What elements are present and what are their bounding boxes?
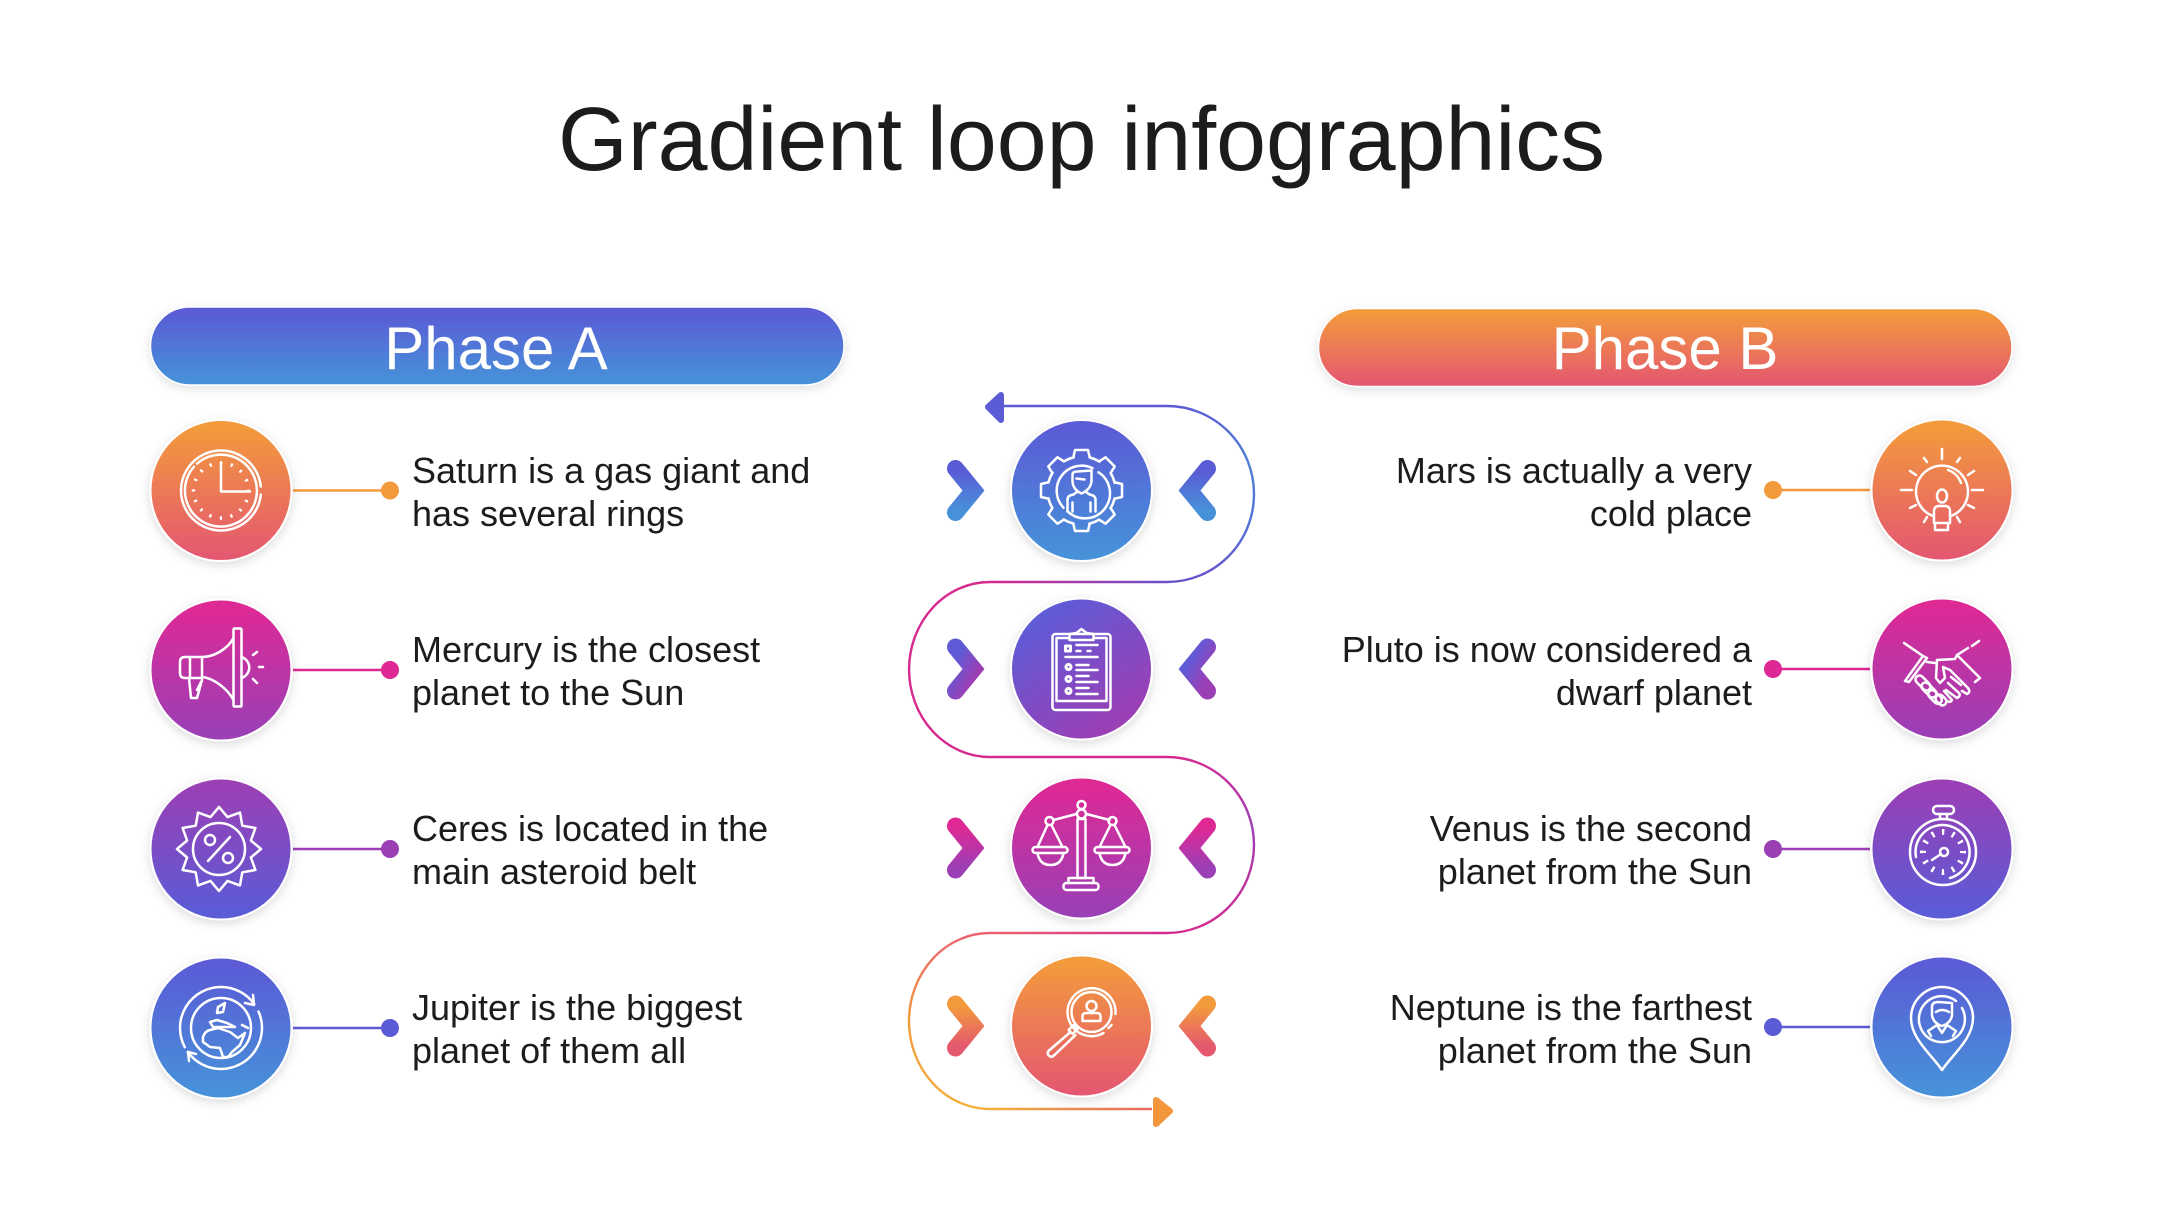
icon: handshake bbox=[1904, 641, 1980, 707]
panel: center step 1 bbox=[956, 420, 1208, 561]
icon: percent badge bbox=[177, 807, 261, 891]
text: Mars: Mars is actually a very bbox=[1396, 450, 1752, 491]
icon: magnifier with person bbox=[1048, 988, 1116, 1057]
panel: Ceres item bbox=[150, 778, 768, 920]
text: Ceres: main asteroid belt bbox=[412, 851, 696, 892]
panel: phase B header bbox=[1318, 308, 2012, 386]
text: Neptune: planet from the Sun bbox=[1438, 1030, 1752, 1071]
text: Mercury: planet to the Sun bbox=[412, 672, 684, 713]
icon: stopwatch bbox=[1910, 806, 1976, 885]
panel: phase A header bbox=[150, 307, 844, 385]
icon: clock bbox=[181, 450, 261, 530]
text: Pluto: dwarf planet bbox=[1556, 672, 1752, 713]
title: Gradient loop infographics bbox=[558, 90, 1605, 190]
text: Jupiter: planet of them all bbox=[412, 1030, 686, 1071]
icon: gear with person bbox=[1041, 450, 1122, 531]
panel: Pluto item bbox=[1342, 598, 2012, 740]
panel: center step 3 bbox=[956, 778, 1208, 918]
text: Mars: cold place bbox=[1590, 493, 1752, 534]
text: Venus: Venus is the second bbox=[1430, 808, 1752, 849]
panel: phase A header: Phase A bbox=[384, 315, 608, 382]
icon: light bulb with person bbox=[1901, 449, 1983, 530]
text: Jupiter: Jupiter is the biggest bbox=[412, 987, 742, 1028]
panel: Saturn item bbox=[150, 420, 810, 561]
panel: phase B header: Phase B bbox=[1552, 315, 1778, 382]
text: Venus: planet from the Sun bbox=[1438, 851, 1752, 892]
panel: Mercury item bbox=[150, 600, 760, 740]
panel: Mars item bbox=[1396, 420, 2012, 560]
panel: Neptune item bbox=[1390, 956, 2012, 1098]
panel: center step 2 bbox=[956, 598, 1208, 740]
text: Saturn: Saturn is a gas giant and bbox=[412, 450, 810, 491]
panel: Jupiter item bbox=[150, 958, 742, 1098]
icon: globe with arrows bbox=[180, 987, 262, 1069]
text: Mercury: Mercury is the closest bbox=[412, 629, 760, 670]
text: Saturn: has several rings bbox=[412, 493, 684, 534]
text: Pluto: Pluto is now considered a bbox=[1342, 629, 1753, 670]
text: Neptune: Neptune is the farthest bbox=[1390, 987, 1752, 1028]
panel: center step 4 bbox=[956, 956, 1208, 1096]
panel: Venus item bbox=[1430, 778, 2012, 920]
icon: clipboard checklist bbox=[1052, 629, 1110, 710]
text: Ceres: Ceres is located in the bbox=[412, 808, 768, 849]
icon: map pin with person bbox=[1911, 987, 1973, 1070]
arrow: gradient loop path bbox=[909, 395, 1254, 1124]
icon: megaphone bbox=[180, 628, 263, 706]
icon: balance scales bbox=[1032, 801, 1130, 890]
